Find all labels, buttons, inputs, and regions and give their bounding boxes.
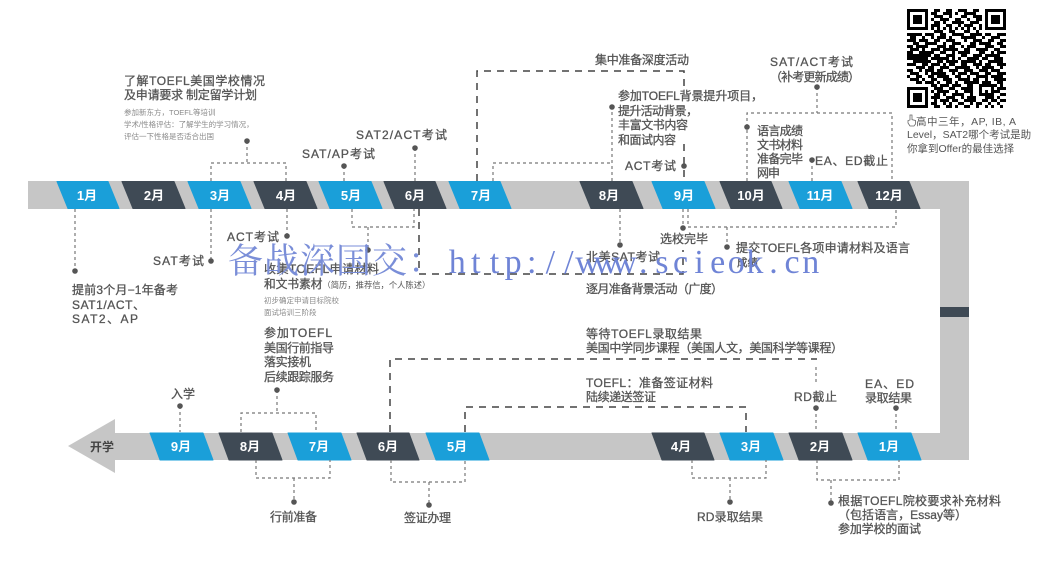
text: school research and plan: 学术/性格评估：了解学生的学习情况，	[124, 119, 254, 129]
text: North America SAT: 北美SAT考试	[586, 249, 660, 264]
text: background improvement: 丰富文书内容	[618, 117, 688, 132]
text: early preparation	[72, 282, 178, 326]
top row months: 11月	[807, 188, 833, 203]
watermark: 备战深国交：	[228, 234, 444, 284]
bottom row months: 1月	[879, 439, 899, 454]
watermark: http://www.scieok.cn	[449, 244, 819, 281]
text: collect materials: 面试培训三阶段	[264, 307, 317, 317]
timeline track: 开学	[90, 439, 114, 454]
text: submit materials: 提交TOEFL各项申请材料及语言	[736, 240, 910, 255]
bottom row months: 9月	[171, 439, 191, 454]
text: visa materials: 陆续递送签证	[586, 389, 656, 404]
text: collect materials: 和文书素材（简历，推荐信，个人陈述）	[264, 277, 430, 291]
text: ACT exam September: ACT考试	[625, 158, 676, 173]
text: pre-departure guidance	[264, 325, 334, 384]
timeline track	[28, 181, 969, 473]
text: collect materials: 收集TOEFL申请材料	[264, 261, 379, 276]
text: pre-departure guidance: 美国行前指导	[264, 340, 334, 355]
text: background improvement	[618, 88, 763, 147]
text: additional materials: （包括语言，Essay等）	[838, 507, 967, 522]
text: additional materials: 参加学校的面试	[838, 521, 921, 536]
text: visa materials: TOEFL：准备签证材料	[586, 375, 713, 390]
top row months: 5月	[341, 188, 361, 203]
text: submit materials	[736, 240, 910, 269]
text: SAT exam: SAT考试	[153, 253, 204, 268]
top row months: 2月	[144, 188, 164, 203]
QR code	[907, 9, 1006, 108]
text: background improvement: 提升活动背景，	[618, 103, 698, 118]
text: materials ready: 文书材料	[757, 137, 803, 152]
text: early preparation: SAT1/ACT、	[72, 298, 145, 312]
text: materials ready: 语言成绩	[757, 124, 803, 138]
watermark	[228, 234, 819, 284]
top row months: 10月	[737, 188, 765, 203]
text: collect materials	[264, 261, 430, 317]
text: SAT/ACT retake	[770, 54, 860, 84]
bottom row months: 8月	[240, 439, 260, 454]
top row months: 9月	[674, 188, 694, 203]
text: EA ED results: 录取结果	[865, 391, 912, 405]
text: SAT/ACT retake: （补考更新成绩）	[770, 69, 860, 84]
QR caption: 你拿到Offer的最佳选择	[907, 142, 1015, 155]
text: RD results: RD录取结果	[697, 510, 763, 524]
top row months	[57, 182, 920, 208]
top row months: 3月	[210, 188, 230, 203]
bottom row months	[150, 433, 921, 460]
text: submit materials: 成绩	[737, 256, 758, 269]
text: pre-departure guidance: 后续跟踪服务	[264, 369, 334, 384]
text: school research and plan	[124, 73, 265, 141]
text: visa materials	[586, 375, 713, 404]
text: early preparation: 提前3个月−1年备考	[72, 282, 178, 297]
text: SAT/AP exam: SAT/AP考试	[302, 146, 375, 161]
QR caption: 高中三年，AP, IB, A	[916, 115, 1016, 128]
top row months: 7月	[471, 188, 491, 203]
bottom row months: 2月	[810, 439, 830, 454]
connector dots	[72, 84, 899, 508]
text: collect materials: 初步确定申请目标院校	[264, 295, 339, 305]
text: school research and plan: 参加新东方，TOEFL等培训	[124, 107, 216, 117]
top row months: 6月	[405, 188, 425, 203]
text: early preparation: SAT2、AP	[72, 312, 138, 326]
text: background improvement: 和面试内容	[618, 132, 676, 147]
text: background improvement: 参加TOEFL背景提升项目，	[618, 88, 763, 103]
text: additional materials: 根据TOEFL院校要求补充材料	[838, 493, 1001, 508]
text: waiting for results	[586, 327, 843, 355]
text: materials ready: 准备完毕	[757, 151, 803, 166]
text: materials ready: 网申	[757, 166, 780, 180]
bottom row months: 3月	[741, 439, 761, 454]
text: visa: 签证办理	[404, 510, 451, 525]
QR caption: Level，SAT2哪个考试是助	[907, 128, 1031, 141]
text: enrollment: 入学	[171, 386, 195, 401]
text: school selection: 选校完毕	[660, 231, 708, 246]
text: waiting for results: 等待TOEFL录取结果	[586, 327, 702, 341]
top row months: 8月	[599, 188, 619, 203]
icon: pointing hand	[908, 115, 916, 126]
text: SAT2/ACT exam: SAT2/ACT考试	[356, 127, 447, 142]
text: waiting for results: 美国中学同步课程（美国人文，美国科学等课程）	[586, 340, 843, 355]
bottom row months: 6月	[378, 439, 398, 454]
top row months: 1月	[77, 188, 97, 203]
text: deep activities: 集中准备深度活动	[595, 52, 689, 67]
text: school research and plan: 评估一下性格是否适合出国	[124, 131, 214, 141]
text: EA ED results: EA、ED	[865, 377, 914, 391]
text: ACT exam April: ACT考试	[227, 229, 279, 244]
QR caption	[907, 115, 1031, 155]
text: EA ED results	[865, 377, 914, 405]
text: RD deadline: RD截止	[794, 390, 837, 404]
dashed connectors, thin	[75, 87, 899, 505]
text: EA ED deadline: EA、ED截止	[815, 154, 888, 168]
text: school research and plan: 了解TOEFL美国学校情况	[124, 73, 265, 88]
text: materials ready	[757, 124, 803, 180]
dashed connectors, bold	[390, 71, 817, 432]
bottom row months: 5月	[447, 439, 467, 454]
text: school research and plan: 及申请要求 制定留学计划	[124, 87, 257, 102]
text: additional materials	[838, 493, 1001, 536]
text: monthly activities: 逐月准备背景活动（广度）	[586, 281, 723, 296]
text: pre-departure guidance: 落实接机	[264, 354, 311, 369]
top row months: 4月	[276, 188, 296, 203]
bottom row months: 4月	[671, 439, 691, 454]
text: departure preparation: 行前准备	[270, 509, 317, 524]
top row months: 12月	[875, 188, 903, 203]
text: SAT/ACT retake: SAT/ACT考试	[770, 54, 853, 69]
text: pre-departure guidance: 参加TOEFL	[264, 325, 332, 340]
bottom row months: 7月	[309, 439, 329, 454]
